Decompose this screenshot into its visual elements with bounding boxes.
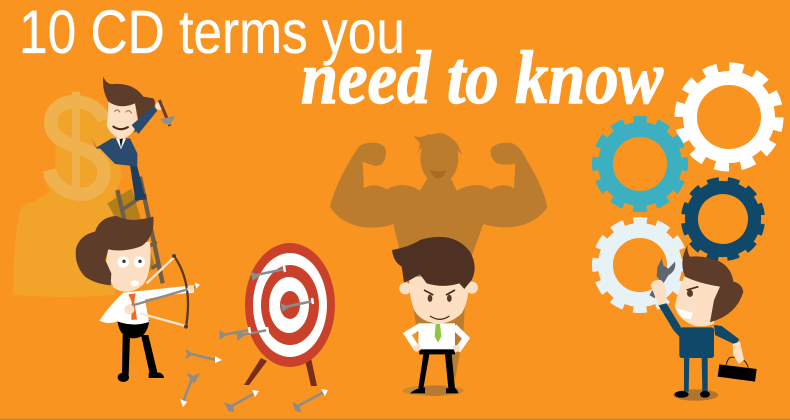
hands [413, 344, 460, 353]
head [392, 237, 478, 323]
businessman on ladder [91, 77, 175, 201]
title: need to know [301, 37, 664, 120]
bow [124, 254, 200, 329]
confident man [392, 237, 478, 393]
target legs [244, 358, 317, 386]
hand with wrench [651, 258, 675, 305]
tie [435, 324, 441, 342]
arrows in target [220, 266, 313, 340]
head [76, 216, 154, 292]
gears [597, 62, 784, 308]
gear: white [674, 62, 784, 172]
gear: teal [597, 121, 683, 207]
body [658, 303, 739, 358]
muscle shadow figure [330, 133, 547, 396]
title [19, 0, 664, 120]
legs [684, 357, 708, 392]
icon: ladder [107, 177, 163, 283]
gear: navy [676, 172, 770, 266]
icon: money bag [13, 92, 122, 297]
tie [128, 293, 137, 320]
target [244, 243, 335, 386]
shirt [99, 285, 194, 325]
legs [418, 348, 455, 388]
loose arrows on ground [180, 350, 328, 411]
legs and shoes [117, 320, 164, 382]
ground shadow [673, 389, 718, 401]
gear: pale blue [597, 222, 683, 308]
archer [76, 216, 200, 382]
head [675, 245, 743, 326]
mechanic [651, 245, 757, 401]
shirt [407, 323, 466, 351]
ground shadow [403, 385, 464, 396]
title: 10 CD terms you [19, 0, 405, 66]
briefcase [718, 342, 757, 382]
target rings [245, 243, 335, 367]
